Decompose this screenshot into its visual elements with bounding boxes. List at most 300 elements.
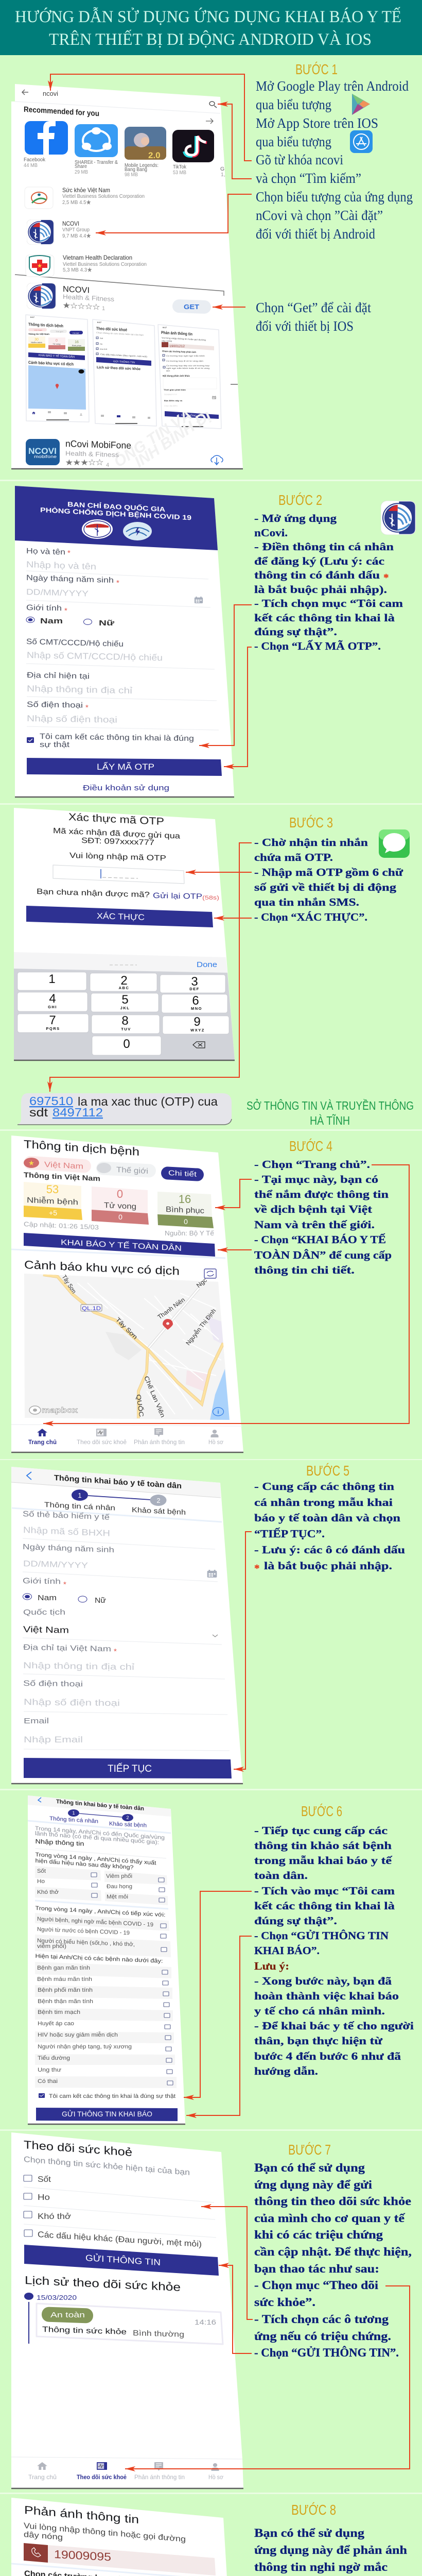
mini phone 2: Sốt (100, 337, 103, 340)
arrow: continue button (234, 1532, 252, 1769)
form fields: Giới tính (26, 603, 62, 613)
mini phone 2: GỬI THÔNG TIN (113, 360, 135, 364)
form fields: Nữ (95, 1596, 106, 1605)
form fields: Nhập thông tin địa chỉ (23, 1660, 134, 1672)
text block: step 5 instructions: - Cung cấp các thông tin (254, 1480, 394, 1493)
mapbox logo (29, 1406, 78, 1415)
numeric keypad: DEF (189, 987, 200, 991)
button: send declaration: GỬI THÔNG TIN KHAI BÁO (62, 2109, 152, 2118)
tab bar: Trang chủ (28, 2473, 57, 2481)
text block: step 5 instructions: “TIẾP TỤC”. (254, 1528, 325, 1540)
disease checklist: Bệnh máu mãn tính (37, 1976, 92, 1982)
icon: shareit (75, 124, 118, 157)
text block: step 4 instructions: TOÀN DÂN” để cung cấp (254, 1249, 392, 1261)
form fields: Nam (40, 617, 63, 625)
contact checklist: Trong vòng 14 ngày , Anh/Chị có tiếp xúc với: (35, 1905, 166, 1918)
GET button (172, 299, 211, 314)
text block: step 6 instructions: hướng dẫn. (254, 2065, 318, 2077)
form fields: Ngày tháng năm sinh (23, 1543, 114, 1554)
section dividers (0, 480, 422, 2494)
contact checklist (35, 1905, 171, 1957)
form fields: Địa chỉ tại Việt Nam (23, 1643, 111, 1653)
stepper: 1 (78, 1492, 82, 1499)
button: declaration: KHAI BÁO Y TẾ TOÀN DÂN (61, 1238, 182, 1253)
arrow: SMS message (50, 843, 252, 1092)
icon: messages (379, 829, 410, 858)
form fields: * (85, 703, 89, 712)
nav bar: Thông tin khai báo y tế toàn dân (56, 1799, 144, 1812)
text block: step 6 instructions: - Để khai bác y tế cho người (254, 2020, 414, 2032)
form fields: sự thật (40, 740, 70, 749)
contact checklist: Người bệnh, nghi ngờ mắc bệnh COVID - 19 (37, 1916, 153, 1928)
SMS bubble: 697510 (29, 1094, 73, 1108)
iOS app header: NCOVI: Health & Fitness (63, 293, 114, 303)
text block: step 5 instructions (254, 1480, 405, 1574)
app result: nCovi MobiFone: nCovi MobiFone (65, 438, 131, 451)
app labels: Facebook (24, 157, 46, 163)
icon: google play (352, 94, 370, 115)
stepper: Khảo sát bệnh (132, 1505, 186, 1516)
map street labels (60, 1274, 217, 1418)
survey questions: Trong 14 ngày, Anh/Chị có đến Quốc gia/vùng (35, 1825, 165, 1841)
screen title: Phản ánh thông tin (24, 2503, 139, 2526)
back arrow and search text (22, 90, 58, 97)
survey questions: Nhập thông tin (35, 1838, 84, 1848)
mini phone 3: 19001212 (169, 345, 185, 348)
mini phone 3: GỬI THÔNG TIN (181, 413, 202, 418)
mini phone 3 (158, 325, 221, 429)
form fields: * (64, 606, 67, 615)
arrow: send declaration (186, 1936, 252, 2115)
arrow: stat cards (215, 1179, 252, 1208)
form fields: Email (24, 1717, 49, 1725)
mini phone 3: Địa điểm xảy ra (164, 399, 183, 402)
map street labels: Nguyễn Thị Định (184, 1307, 217, 1347)
disease checklist: Bệnh tim mạch (38, 2009, 80, 2015)
text block: step 3 instructions: chứa mã OTP. (254, 851, 333, 863)
button: TIẾP TỤC (24, 1758, 232, 1778)
source credit: HÀ TĨNH (310, 1114, 350, 1127)
OTP texts: Mã xác nhận đã được gửi qua (53, 826, 181, 841)
list item: Vietnam Health Declaration: ★ (37, 263, 42, 268)
text block: step 1 instructions: Mở Google Play trên Android (256, 78, 409, 94)
mini phone 1: Thông tin dịch bệnh (28, 322, 63, 328)
text block: step 6 instructions: trong mẫu khai báo y tế (254, 1854, 393, 1867)
numeric keypad (17, 972, 229, 1055)
form fields: Số thẻ bảo hiểm y tế (23, 1510, 110, 1522)
mini phone 1: Chi tiết (73, 332, 79, 334)
OTP texts: Bạn chưa nhận được mã? (37, 887, 150, 900)
stepper: 1 (72, 1810, 75, 1816)
app result: nCovi MobiFone (26, 438, 223, 468)
SMS bubble: 8497112 (52, 1106, 103, 1119)
button: LẤY MÃ OTP (27, 758, 222, 776)
mapbox logo: mapbox (42, 1406, 78, 1415)
keyboard toolbar: Done (197, 960, 217, 969)
arrow: declaration button (218, 1249, 252, 1250)
text block: step 1 instructions: đối với thiết bị Android (256, 226, 375, 242)
symptom options: Ho (38, 2193, 50, 2202)
text block: step 7 instructions: - Chọn “GỬI THÔNG TIN”. (254, 2346, 399, 2359)
terms link: Điều khoản sử dụng (83, 784, 169, 792)
mini phone 1: Thông tin Việt Nam (28, 333, 49, 335)
text block: step 2 instructions: thông tin có đánh dấu (254, 569, 380, 581)
OTP texts: Xác thực mã OTP (68, 811, 164, 827)
disease checklist: Hiện tại Anh/Chị có các bệnh nào dưới đây: (35, 1953, 163, 1964)
watermark: ÔNG TIN VÀ TRU (111, 385, 225, 471)
text block: step 1 instructions: đối với thiết bị IOS (256, 318, 354, 334)
panel: step 8 report information (11, 2498, 245, 2576)
arrow: OTP input (186, 872, 252, 873)
mini phone 1: Nhiễm bệnh (31, 341, 42, 344)
text block: step 7 instructions: bạn thao tác như sau: (254, 2262, 379, 2275)
app labels: 29 MB (75, 169, 88, 175)
text block: step 2 instructions: nCovi. (254, 527, 288, 539)
app labels: 44 MB (24, 162, 38, 168)
stepper: Thông tin cá nhân (44, 1500, 115, 1512)
mini phone 3: dịch (166, 369, 170, 372)
form fields: Nhập số CMT/CCCD/Hộ chiếu (27, 650, 163, 663)
disease checklist: Ung thư (38, 2067, 62, 2073)
tab bar: Theo dõi sức khoẻ (77, 1438, 127, 1446)
text block: step 3 instructions: - Chọn “XÁC THỰC”. (254, 911, 367, 923)
text block: step 6 instructions: - Xong bước này, bạn đã (254, 1975, 392, 1987)
screen title: Thông tin dịch bệnh (24, 1138, 139, 1158)
heading: step 5: BƯỚC 5 (306, 1463, 349, 1479)
app labels: G (220, 166, 224, 172)
form fields: Ngày tháng năm sinh (26, 573, 114, 585)
text block: step 3 instructions (254, 836, 403, 923)
intro text: Vui lòng nhập thông tin hoặc gọi đường (24, 2521, 186, 2544)
form fields: Địa chỉ hiện tại (27, 671, 90, 681)
source credit (247, 1098, 414, 1127)
text block: step 7 instructions: của mình cho cơ quan y tế (254, 2212, 406, 2225)
info icon: i (217, 1409, 219, 1415)
list item: NCOVI: 9,7 MB 4.4★ (62, 233, 91, 239)
button: send info (24, 2245, 219, 2276)
update notes: Cập nhật: 01:26 15/03 (24, 1221, 99, 1231)
form fields: Nhập số điện thoại (24, 1697, 120, 1708)
update notes: Nguồn: Bộ Y Tế (165, 1230, 214, 1237)
text block: step 6 instructions: - Chọn “GỬI THÔNG TIN (254, 1929, 389, 1942)
numeric keypad: 6 (192, 994, 199, 1008)
app labels: 98 MB (125, 172, 138, 178)
intro text: dây nóng (24, 2530, 63, 2542)
app labels: 53 MB (173, 170, 186, 176)
OTP texts: SĐT: 097xxxx777 (81, 836, 154, 847)
list item: Sức khỏe Việt Nam: 2,5 MB 4.5★ (62, 199, 91, 206)
nav bar (11, 1472, 221, 1498)
text block: step 7 instructions: ứng dụng này để gửi (254, 2178, 373, 2191)
mini phone 3: Có trường hợp tiếp xúc với trường hợp (166, 364, 210, 367)
symptom options: Sốt (38, 2175, 51, 2184)
watermark: ÌNH BÌNH ĐỊ (131, 406, 215, 471)
survey questions (35, 1825, 166, 1871)
form fields: Nhập mã số BHXH (23, 1525, 110, 1538)
list item: Sức khỏe Việt Nam: Viettel Business Solutions Corporation (62, 193, 145, 199)
recommended heading: Recommended for you (24, 105, 99, 118)
mini phone 1: Thế giới (56, 330, 63, 333)
mini phone 1: 30 (34, 338, 39, 342)
mini phone 3: Chọn các trường hợp phản ánh (162, 350, 196, 353)
numeric keypad: 3 (191, 975, 198, 989)
numeric keypad: PQRS (46, 1026, 60, 1031)
symptom checklist: Khó thở (37, 1889, 59, 1895)
disease checklist: Bệnh gan mãn tính (37, 1965, 90, 1971)
OTP texts: (58s) (202, 895, 219, 901)
map street labels: Thanh Niên (156, 1296, 186, 1320)
mini phone 2 (93, 319, 156, 426)
text block: step 6 instructions: - Tích vào mục “Tôi cam (254, 1885, 395, 1897)
text block: step 7 instructions (254, 2161, 412, 2359)
tab bar (28, 2462, 223, 2481)
text block: step 5 instructions: * (254, 1562, 259, 1574)
arrow: GET button (213, 307, 245, 308)
button: TIẾP TỤC: TIẾP TỤC (108, 1763, 152, 1774)
mini phone 1: Bình phục (72, 344, 81, 347)
text block: step 2 instructions: - Điền thông tin cá nhân (254, 540, 394, 553)
form fields (23, 1510, 230, 1751)
text block: step 6 instructions (254, 1824, 414, 2077)
mini phone 3: DD/MM/YYYY (164, 393, 178, 396)
button: send declaration (36, 2108, 178, 2121)
survey questions: lãnh thổ nào (có thể đi qua nhiều quốc gia): (35, 1831, 159, 1846)
numeric keypad: 7 (49, 1013, 56, 1027)
app result: nCovi MobiFone: ★★★☆☆ (65, 459, 103, 466)
text block: step 6 instructions: - Tiếp tục cung cấp các (254, 1824, 388, 1837)
stat card: recovered (157, 1192, 214, 1228)
text block: step 2 instructions: để đăng ký (Lưu ý: các (254, 555, 384, 567)
icon: refresh (204, 1269, 216, 1278)
mini phone 3: Thời gian phát hiện (164, 388, 186, 391)
iOS app header: NCOVI: ★☆☆☆☆ (63, 301, 100, 311)
text block: step 2 instructions: - Chọn “LẤY MÃ OTP”. (254, 640, 381, 652)
mini phone 2: Các dấu hiệu khác (đau người, mệt mỏi) (100, 353, 148, 358)
map street labels: QUỐC (135, 1394, 146, 1417)
text block: step 6 instructions: Lưu ý: (254, 1960, 289, 1972)
stepper: Thông tin cá nhân (49, 1816, 98, 1825)
survey questions: hiện dấu hiệu nào sau đây không? (35, 1858, 134, 1871)
text block: step 1 instructions: qua biểu tượng (256, 97, 331, 112)
subtitle: Chọn thông tin sức khỏe hiện tại của bạn (24, 2155, 190, 2177)
numeric keypad: GHI (48, 1005, 57, 1009)
stat card: deaths (92, 1187, 149, 1225)
stat card: deaths: 0 (117, 1188, 123, 1200)
arrow: symptom options (201, 2207, 253, 2319)
road badge: QL.1D (82, 1306, 101, 1312)
symptom checklist (35, 1866, 168, 1905)
button: XÁC THỰC: XÁC THỰC (97, 911, 145, 922)
list item: Sức khỏe Việt Nam (25, 187, 145, 209)
numeric keypad: WXYZ (190, 1028, 205, 1032)
region tabs: Việt Nam (44, 1160, 83, 1171)
text block: step 4 instructions: thể nắm được thông tin (254, 1188, 389, 1200)
OTP texts: Gửi lại OTP (153, 891, 202, 901)
symptom checklist: Đau họng (107, 1884, 132, 1890)
mini phone 2: Khó thở (100, 348, 108, 350)
text block: step 5 instructions: cá nhân trong mẫu khai (254, 1496, 393, 1509)
contact checklist: Người có biểu hiện (sốt,ho , khó thở, (37, 1938, 135, 1948)
icon: app store (350, 130, 373, 153)
disease checklist: HIV hoặc suy giảm miễn dịch (38, 2031, 118, 2038)
tab bar: Hồ sơ (208, 1438, 223, 1446)
numeric keypad: 9 (194, 1015, 201, 1029)
text block: step 7 instructions: - Chọn mục “Theo dõi (254, 2279, 379, 2292)
mini phone 3: Vui lòng nhập thông tin hoặc gọi đường (162, 336, 206, 341)
list item: NCOVI: NCOVI (62, 220, 79, 227)
button: send info: GỬI THÔNG TIN (85, 2253, 161, 2267)
symptom checklist: Mệt mỏi (107, 1894, 128, 1900)
mini phone 1: 0 (56, 339, 58, 343)
heading: step 1: BƯỚC 1 (295, 61, 338, 77)
text block: step 7 instructions: thông tin theo dõi sức khỏe (254, 2195, 411, 2208)
text block: step 1 instructions: Mở App Store trên IOS (256, 115, 378, 131)
tab bar (28, 1428, 223, 1446)
mini phone 2: Ho (100, 343, 103, 345)
map street labels: Tây Sơn (60, 1274, 78, 1295)
iOS app header: NCOVI: 1 (102, 306, 105, 312)
mini phone 3: Nội dung phản ánh khác (163, 375, 190, 377)
map heading: Cảnh báo khu vực có dịch (24, 1258, 180, 1278)
mini phone 1 (26, 315, 89, 422)
text block: step 7 instructions: - Tích chọn các ô tương (254, 2313, 389, 2326)
heading: step 8: BƯỚC 8 (291, 2502, 336, 2518)
button: LẤY MÃ OTP: LẤY MÃ OTP (97, 762, 154, 772)
mini phone 1: 16 (75, 341, 79, 344)
app result: nCovi MobiFone: Health & Fitness (65, 450, 119, 459)
icon: mobile legends (125, 127, 166, 160)
tab bar: Phản ánh thông tin (134, 1438, 185, 1446)
region tabs (23, 1156, 204, 1181)
mini phone 1: Việt Nam (34, 329, 43, 331)
form header: BAN CHỈ ĐẠO QUỐC GIA (67, 500, 166, 513)
text block: step 3 instructions: số gửi về thiết bị di động (254, 881, 397, 893)
app result: nCovi MobiFone: 4 (106, 462, 109, 468)
nav bar: Thông tin khai báo y tế toàn dân (54, 1473, 182, 1490)
form fields: * (114, 1647, 117, 1656)
symptom checklist: Sốt (37, 1868, 46, 1874)
disease checklist: Bệnh thận mãn tính (38, 1998, 93, 2005)
text block: step 2 instructions: * (383, 571, 389, 584)
arrow: commitment (184, 1891, 252, 2097)
form fields: Nữ (99, 619, 114, 628)
app result: nCovi MobiFone: mobifone (34, 454, 57, 459)
text block: step 4 instructions: - Tại mục này, bạn có (254, 1173, 378, 1185)
title (15, 6, 401, 49)
stepper (44, 1489, 186, 1516)
app labels: Bang Bang (125, 166, 147, 173)
SMS bubble: sdt (29, 1106, 48, 1119)
form fields: Việt Nam (23, 1624, 69, 1635)
mini phone 1: Tử vong (53, 343, 60, 345)
text block: step 8 instructions: thông tin nghi ngờ mắc (254, 2561, 388, 2573)
text block: step 6 instructions: bước 4 đến bước 6 như đã (254, 2050, 401, 2062)
form fields: Nhập số điện thoại (27, 714, 117, 725)
mini phone 3: 9:17 (163, 326, 167, 329)
app labels: Share (75, 163, 87, 170)
numeric keypad: 5 (121, 993, 129, 1007)
form header: PHÒNG CHỐNG DỊCH BỆNH COVID 19 (40, 506, 191, 521)
stat card: infected: +5 (49, 1209, 57, 1217)
arrow: verify button (214, 918, 252, 919)
panel: step 5 personal info form (11, 1467, 243, 1784)
list item: Sức khỏe Việt Nam: Sức khỏe Việt Nam (62, 187, 110, 194)
text block: step 8 instructions (254, 2527, 407, 2576)
list item: Vietnam Health Declaration: Vietnam Health Declaration (63, 254, 132, 261)
mini phone 2: Theo dõi sức khoẻ (96, 326, 127, 332)
mini phone 2: Chọn thông tin sức khỏe hiện tại của bạn (96, 331, 144, 336)
survey questions: Trong vòng 14 ngày , Anh/Chị có thấy xuất (35, 1852, 156, 1866)
numeric keypad: 1 (48, 972, 56, 986)
numeric keypad: MNO (191, 1006, 202, 1011)
text block: step 2 instructions: kết các thông tin khai là (254, 612, 395, 624)
stat card: infected: Nhiễm bệnh (27, 1196, 78, 1207)
form fields: Họ và tên (26, 547, 65, 557)
form fields: * (116, 579, 119, 587)
form fields: DD/MM/YYYY (26, 588, 89, 599)
panel: step 1 app store screenshots (11, 84, 243, 471)
form fields: Nhập họ và tên (26, 560, 96, 571)
mini phone 3: Có trường hợp nghi ngờ mắc bệnh (166, 354, 205, 357)
numeric keypad: JKL (120, 1006, 130, 1010)
form fields: Quốc tịch (23, 1608, 65, 1617)
text block: step 4 instructions: về dịch bệnh tại Việt (254, 1203, 372, 1215)
form fields (26, 547, 219, 749)
disease checklist: Bệnh phổi mãn tính (38, 1987, 93, 1993)
app labels: TikTok (173, 164, 187, 170)
numeric keypad: TUV (121, 1027, 131, 1031)
hotline (24, 2543, 216, 2575)
form fields: Nam (38, 1594, 57, 1602)
symptom options: Các dấu hiệu khác (Đau người, mệt mỏi) (38, 2230, 202, 2249)
text block: step 2 instructions: - Mở ứng dụng (254, 512, 337, 524)
form fields: * (63, 1580, 66, 1589)
mini phone 1: KHAI BÁO Y TẾ TOÀN DÂN (39, 353, 75, 359)
text block: step 6 instructions: KHAI BÁO”. (254, 1944, 320, 1957)
button: XÁC THỰC (26, 906, 213, 927)
stat card: deaths: 0 (118, 1213, 122, 1221)
list item: Vietnam Health Declaration: Viettel Business Solutions Corporation (63, 261, 147, 267)
text block: step 4 instructions: - Chọn “Trang chủ”. (254, 1158, 370, 1171)
text block: step 5 instructions: báo y tế toàn dân và chọn (254, 1512, 400, 1524)
mini phone 1: Cảnh báo khu vực có dịch (28, 360, 74, 367)
symptom options (24, 2175, 216, 2249)
arrow: search icon (218, 104, 252, 179)
list item: NCOVI (27, 219, 91, 245)
text block: step 1 instructions: Chọn “Get” để cài đặt (256, 300, 371, 315)
tab bar: Theo dõi sức khoẻ (77, 2473, 127, 2481)
text block: step 3 instructions: - Chờ nhận tin nhắn (254, 836, 368, 849)
header band (0, 0, 422, 55)
stepper: 2 (156, 1497, 161, 1504)
app labels: SHAREit - Transfer & (75, 159, 118, 165)
timeline entry: 15/03/2020 (37, 2294, 77, 2301)
panel: step 4 home screen (11, 1136, 243, 1452)
subheading: Thông tin Việt Nam (24, 1171, 100, 1182)
arrow: home tab (43, 1165, 409, 1423)
form fields: Nhập thông tin địa chỉ (27, 684, 132, 696)
text block: step 7 instructions: cần cập nhật. Để thực hiện, (254, 2245, 412, 2258)
text block: step 1 instructions: qua biểu tượng (256, 134, 331, 149)
SMS bubble: la ma xac thuc (OTP) cua (78, 1095, 218, 1108)
OTP texts: Vui lòng nhập mã OTP (69, 851, 166, 863)
text block: step 1 instructions: Gõ từ khóa ncovi (256, 152, 343, 167)
form header (15, 486, 218, 550)
disease checklist (35, 1953, 177, 2088)
arrow: OTP button (224, 647, 252, 767)
info icon (213, 1408, 223, 1416)
arrow: tracking tab (125, 2286, 410, 2469)
